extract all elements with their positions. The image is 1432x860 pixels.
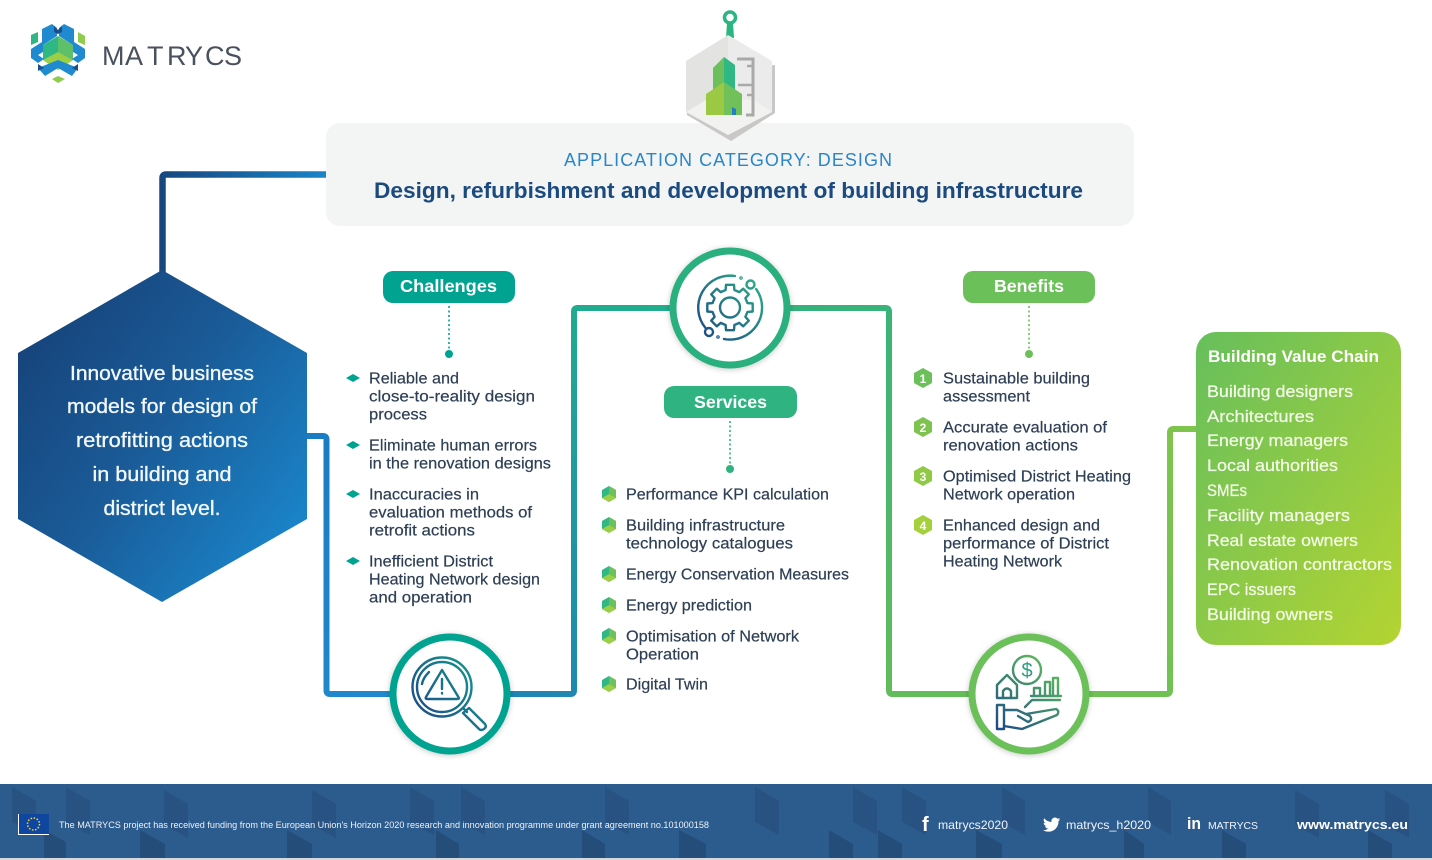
panel: building value chain: EPC issuers <box>1207 580 1296 599</box>
icon: building hexagon with pin <box>686 12 775 141</box>
benefit 2 <box>914 417 1108 455</box>
panel: benefits <box>914 271 1131 571</box>
panel: main hexagon statement <box>18 270 307 602</box>
main title: Design, refurbishment and development of building infrastructure <box>374 178 1083 203</box>
panel: building value chain: Local authorities <box>1207 456 1338 475</box>
panel: challenges <box>346 271 551 607</box>
service 1: Performance KPI calculation <box>626 487 829 504</box>
challenge 3: evaluation methods of <box>369 505 533 522</box>
heading pill: services: Services <box>694 392 767 412</box>
benefit 1: 1 <box>920 372 927 386</box>
challenge 1: Reliable and <box>369 371 459 388</box>
dotted connector: benefits <box>1025 306 1033 358</box>
service 5: Optimisation of Network <box>626 629 799 646</box>
heading pill: services <box>664 386 797 418</box>
icon: EU flag <box>18 814 49 835</box>
footer social: linkedin: in <box>1187 814 1201 833</box>
benefit 4 <box>914 515 1110 571</box>
challenge 4: Heating Network design <box>369 572 540 589</box>
panel: building value chain: Facility managers <box>1207 506 1350 525</box>
challenge 4: and operation <box>369 590 472 607</box>
challenge 1: process <box>369 407 427 424</box>
service 5 <box>602 628 799 664</box>
challenge 3 <box>346 487 533 540</box>
heading pill: challenges <box>383 271 515 303</box>
benefit 4: performance of District <box>943 536 1110 553</box>
heading pill: benefits: Benefits <box>994 276 1064 296</box>
footer social: linkedin <box>1187 814 1258 833</box>
footer social: linkedin: MATRYCS <box>1208 820 1258 832</box>
benefit 4: Heating Network <box>943 554 1062 571</box>
panel: services <box>602 386 849 694</box>
icon: challenges magnifier circle <box>393 637 507 751</box>
panel: building value chain: Building designers <box>1207 382 1353 401</box>
footer funding text: The MATRYCS project has received funding from the European Union's Horizon 2020 research and innovation programme under grant agreement no.101000158 <box>59 820 709 830</box>
service 2: Building infrastructure <box>626 518 785 535</box>
service 6: Digital Twin <box>626 677 708 694</box>
challenge 1: close-to-reality design <box>369 389 535 406</box>
connector: services to benefits <box>785 308 974 694</box>
benefit 1: assessment <box>943 389 1031 406</box>
footer social: facebook <box>922 814 1008 836</box>
benefit 3: Optimised District Heating <box>943 469 1131 486</box>
panel: main hexagon statement: Innovative business <box>70 362 254 385</box>
icon: benefits hand circle <box>972 637 1086 751</box>
challenge 3: retrofit actions <box>369 523 475 540</box>
panel: building value chain <box>1196 332 1401 645</box>
panel: main hexagon statement: models for design of <box>67 395 257 418</box>
panel: building value chain: Renovation contractors <box>1207 555 1392 574</box>
challenge 4 <box>346 554 540 607</box>
dotted connector: challenges <box>445 306 453 358</box>
dotted connector: services <box>726 421 734 473</box>
benefit 3 <box>914 466 1131 504</box>
header panel <box>326 123 1134 226</box>
footer social: twitter: matrycs_h2020 <box>1066 818 1151 832</box>
benefit 1: Sustainable building <box>943 371 1090 388</box>
icon: services gear circle <box>673 251 787 365</box>
footer band <box>0 784 1432 860</box>
footer social: facebook: f <box>922 814 929 836</box>
service 2: technology catalogues <box>626 536 793 553</box>
panel: building value chain: Architectures <box>1207 407 1314 426</box>
panel: main hexagon statement: district level. <box>104 497 220 520</box>
connector: benefits to value chain <box>1084 429 1200 694</box>
footer social: facebook: matrycs2020 <box>938 818 1008 832</box>
benefit 3: Network operation <box>943 487 1075 504</box>
panel: building value chain: Building Value Chain <box>1208 348 1379 366</box>
benefit 4: Enhanced design and <box>943 518 1100 535</box>
service 4: Energy prediction <box>626 598 752 615</box>
challenge 2 <box>346 438 551 473</box>
connector: hexagon to challenges <box>300 436 395 694</box>
panel: building value chain: Real estate owners <box>1207 531 1358 550</box>
connector: challenges to services <box>505 308 675 694</box>
benefit 3: 3 <box>920 470 927 484</box>
panel: building value chain: SMEs <box>1207 481 1247 500</box>
logo: MATRYCS: MATRYCS <box>102 41 242 71</box>
benefit 2: Accurate evaluation of <box>943 420 1108 437</box>
service 5: Operation <box>626 647 699 664</box>
challenge 3: Inaccuracies in <box>369 487 479 504</box>
heading pill: benefits <box>963 271 1095 303</box>
panel: main hexagon statement: retrofitting actions <box>76 429 248 452</box>
connector: title to hexagon <box>162 174 326 275</box>
benefit 4: 4 <box>920 519 927 533</box>
challenge 1 <box>346 371 535 424</box>
heading pill: challenges: Challenges <box>400 276 497 296</box>
category label: APPLICATION CATEGORY: DESIGN <box>564 150 892 170</box>
panel: building value chain: Building owners <box>1207 605 1333 624</box>
challenge 4: Inefficient District <box>369 554 494 571</box>
panel: building value chain: Energy managers <box>1207 431 1348 450</box>
challenge 2: in the renovation designs <box>369 456 551 473</box>
service 2 <box>602 517 793 553</box>
footer website: www.matrycs.eu <box>1296 817 1408 832</box>
benefit 1 <box>914 368 1090 406</box>
service 3: Energy Conservation Measures <box>626 567 849 584</box>
benefit 2: 2 <box>920 421 927 435</box>
icon: benefits hand circle: $ <box>1021 660 1033 682</box>
panel: main hexagon statement: in building and <box>92 463 232 486</box>
benefit 2: renovation actions <box>943 438 1078 455</box>
challenge 2: Eliminate human errors <box>369 438 537 455</box>
logo: MATRYCS <box>31 24 242 83</box>
